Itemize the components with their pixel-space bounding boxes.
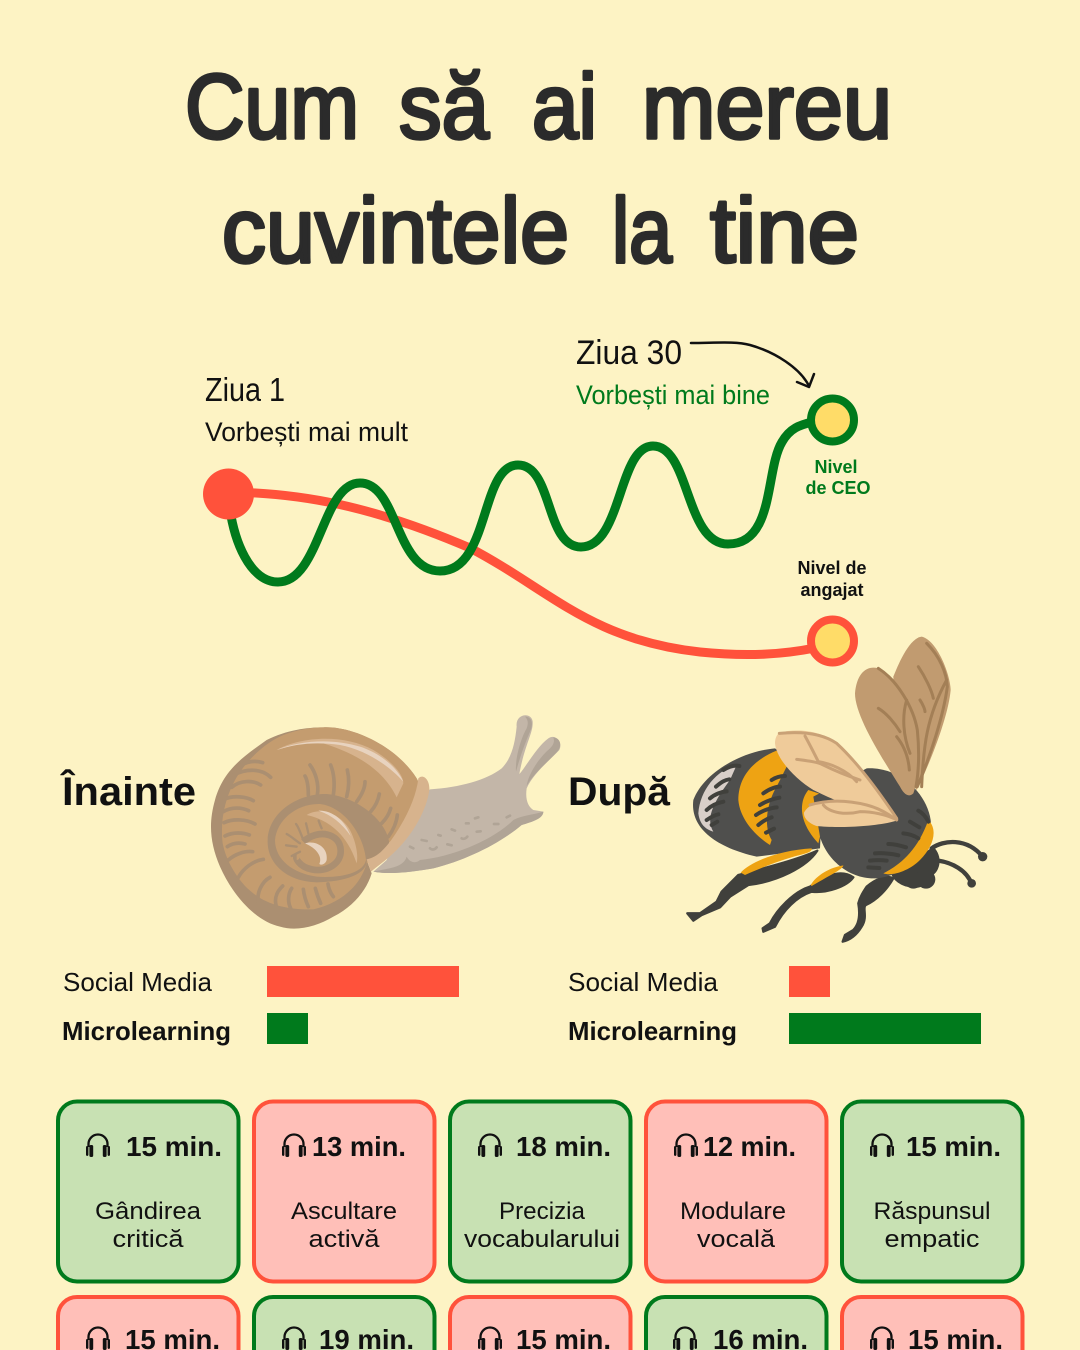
card: row 2 column 4 bbox=[646, 1297, 826, 1350]
label: day 1: Vorbești mai mult bbox=[205, 417, 408, 447]
title: mereu bbox=[642, 56, 892, 158]
bars: after bbox=[568, 966, 981, 1046]
label: microlearning before: Microlearning bbox=[62, 1016, 231, 1046]
heading: before: Înainte bbox=[60, 768, 196, 814]
label: day 30 bbox=[576, 334, 770, 410]
title: ai bbox=[532, 56, 597, 158]
label: social media before: Social Media bbox=[63, 967, 213, 997]
card: active listening: 13 min. bbox=[312, 1131, 406, 1162]
card: vocabulary precision: 18 min. bbox=[516, 1131, 611, 1162]
card: critical thinking bbox=[58, 1102, 238, 1282]
card: empathic response: 15 min. bbox=[906, 1131, 1001, 1162]
card: active listening bbox=[254, 1102, 434, 1282]
curve: CEO level bbox=[228, 422, 812, 582]
label: CEO level bbox=[805, 457, 871, 498]
antennae bbox=[932, 842, 987, 888]
card: vocal modulation: 12 min. bbox=[703, 1131, 796, 1162]
card: active listening: activă bbox=[308, 1226, 380, 1253]
card: vocal modulation bbox=[646, 1102, 826, 1282]
card: active listening: Ascultare bbox=[291, 1198, 397, 1225]
title: cuvintele bbox=[222, 180, 569, 282]
start point bbox=[203, 468, 254, 520]
label: microlearning after: Microlearning bbox=[568, 1016, 737, 1046]
curve: employee level bbox=[228, 492, 815, 655]
bar: microlearning after bbox=[789, 1013, 981, 1044]
card: empathic response bbox=[842, 1102, 1022, 1282]
card: row 2 column 1 bbox=[58, 1297, 238, 1350]
card: empathic response: empatic bbox=[884, 1226, 980, 1253]
card: vocal modulation: vocală bbox=[697, 1226, 776, 1253]
label: CEO level: Nivel bbox=[814, 457, 858, 477]
title bbox=[185, 56, 892, 282]
label: day 30: Vorbești mai bine bbox=[576, 380, 770, 410]
card: vocabulary precision: vocabularului bbox=[464, 1226, 620, 1253]
end point: CEO bbox=[811, 398, 854, 442]
bar: microlearning before bbox=[267, 1013, 308, 1044]
card: vocal modulation: Modulare bbox=[680, 1198, 786, 1225]
label: employee level bbox=[797, 558, 867, 600]
label: social media after: Social Media bbox=[568, 967, 719, 997]
label: CEO level: de CEO bbox=[805, 478, 871, 498]
panel: card grid row 2 bbox=[58, 1297, 1022, 1350]
end point: employee bbox=[811, 620, 854, 662]
legs bbox=[687, 851, 893, 942]
title: tine bbox=[710, 180, 859, 282]
label: day 1: Ziua 1 bbox=[205, 371, 285, 408]
label: day 30: Ziua 30 bbox=[576, 334, 682, 372]
label: employee level: Nivel de bbox=[797, 558, 867, 578]
rear wings bbox=[893, 637, 951, 790]
card: empathic response: Răspunsul bbox=[874, 1198, 990, 1225]
card: row 2 column 3 bbox=[450, 1297, 630, 1350]
bars: before bbox=[62, 966, 459, 1046]
bar: social media after bbox=[789, 966, 830, 997]
title: la bbox=[612, 180, 673, 282]
arrow bbox=[691, 342, 814, 387]
card: critical thinking: critică bbox=[112, 1226, 184, 1253]
front wings bbox=[775, 731, 898, 819]
illustration: snail bbox=[211, 715, 560, 929]
label: employee level: angajat bbox=[800, 580, 864, 600]
title: Cum bbox=[185, 56, 359, 158]
title: să bbox=[399, 56, 490, 158]
head bbox=[892, 847, 940, 889]
card: critical thinking: 15 min. bbox=[126, 1131, 222, 1162]
chart: progress curves bbox=[203, 398, 854, 662]
card: vocabulary precision: Precizia bbox=[499, 1198, 586, 1225]
card: row 2 column 2 bbox=[254, 1297, 434, 1350]
label: day 1 bbox=[205, 371, 408, 447]
card: critical thinking: Gândirea bbox=[95, 1198, 202, 1225]
card: row 2 column 5 bbox=[842, 1297, 1022, 1350]
card: vocabulary precision bbox=[450, 1102, 630, 1282]
bar: social media before bbox=[267, 966, 459, 997]
heading: after: După bbox=[568, 770, 671, 814]
panel: card grid row 1 bbox=[58, 1102, 1022, 1282]
illustration: bee bbox=[687, 637, 987, 942]
